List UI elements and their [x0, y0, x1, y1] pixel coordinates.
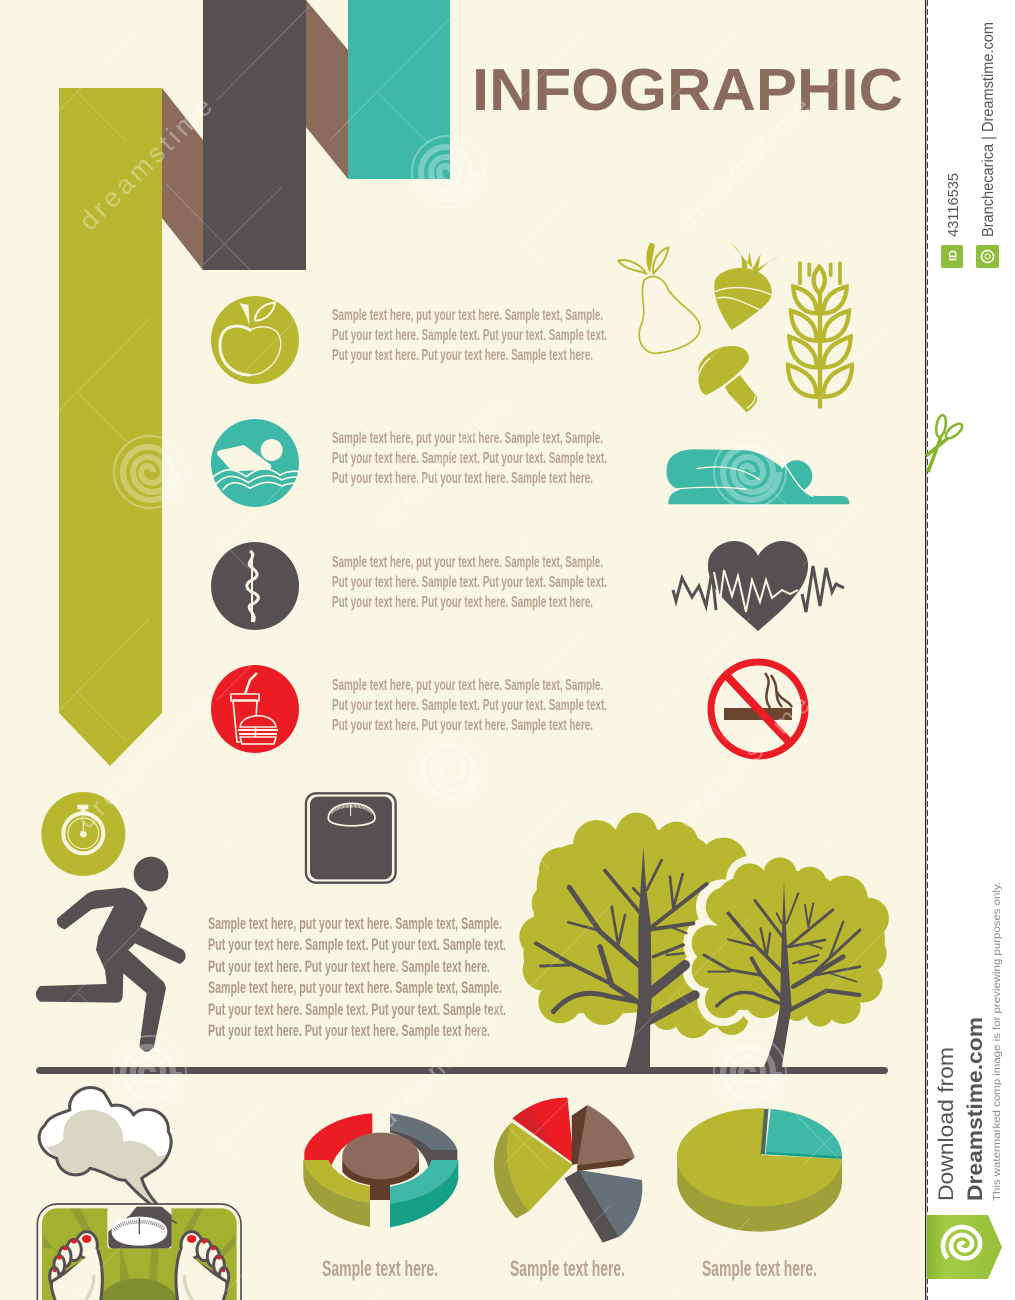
big tree trunk and branches	[536, 847, 707, 1069]
small tree halo and canopy	[683, 856, 860, 1027]
credit: Branchecarica | Dreamstime.com	[980, 22, 997, 237]
icon: turnip	[714, 243, 779, 330]
watermark words: dreamstime	[671, 91, 816, 236]
text block 1: Sample text here, put your text here. Sample text, Sample.	[332, 307, 603, 324]
text block 4: Put your text here. Sample text. Put your text. Sample text.	[332, 697, 607, 714]
text block 3: Put your text here. Sample text. Put your text. Sample text.	[332, 574, 607, 591]
bottom paragraph: Sample text here, put your text here. Sample text, Sample.	[208, 979, 502, 997]
text block 1	[332, 307, 607, 364]
text block 4: Sample text here, put your text here. Sample text, Sample.	[332, 677, 603, 694]
watermark words	[71, 91, 816, 1134]
bottom paragraph: Put your text here. Sample text. Put your text. Sample text.	[208, 1001, 506, 1019]
chart label 1: Sample text here.	[322, 1256, 438, 1281]
icon: mushroom	[698, 346, 757, 412]
text block 4: Put your text here. Put your text here. Sample text here.	[332, 717, 593, 734]
title: INFOGRAPHIC	[472, 57, 903, 123]
scale with feet	[37, 1204, 241, 1300]
icon: bathroom scale	[306, 793, 396, 883]
watermark words: dreamstime	[371, 989, 516, 1134]
text block 2: Sample text here, put your text here. Sample text, Sample.	[332, 430, 603, 447]
chart label 3: Sample text here.	[702, 1256, 817, 1281]
preview note: This watermarked comp image is for previewing purposes only.	[991, 882, 1003, 1201]
image id: 43116535	[945, 173, 962, 237]
big tree canopy	[519, 813, 750, 1038]
download heading: Download from	[935, 1047, 958, 1201]
exploded pie chart	[494, 1098, 642, 1243]
text block 2: Put your text here. Sample text. Put your text. Sample text.	[332, 450, 607, 467]
right foot	[176, 1232, 229, 1300]
watermark words: dreamstime	[73, 91, 218, 236]
watermark spirals	[114, 136, 786, 1108]
ground line	[36, 1067, 888, 1074]
ring chart	[303, 1113, 458, 1227]
small tree trunk and branches	[704, 882, 860, 1069]
ribbon: green, brown, dark and teal bands	[59, 0, 450, 766]
badge: copyright	[976, 245, 999, 268]
bottom paragraph: Put your text here. Put your text here. Sample text here.	[208, 958, 490, 976]
watermark words: dreamstime	[71, 689, 216, 834]
icon: yoga pose	[667, 449, 849, 504]
left foot	[50, 1232, 102, 1300]
cut line	[925, 0, 928, 1300]
text block 2	[332, 430, 607, 487]
icon: wheat	[788, 262, 852, 408]
text block 3: Sample text here, put your text here. Sample text, Sample.	[332, 554, 603, 571]
trees	[519, 813, 889, 1069]
icon: heart with pulse	[673, 541, 844, 631]
watermark words: dreamstime	[671, 689, 816, 834]
icon: no smoking	[711, 662, 805, 756]
badge: ID	[941, 245, 963, 268]
text block 4	[332, 677, 607, 734]
thought bubble	[39, 1087, 177, 1223]
text block 2: Put your text here. Put your text here. Sample text here.	[332, 470, 593, 487]
icon: rod of asclepius circle	[211, 542, 299, 630]
bottom paragraph	[208, 915, 506, 1040]
download banner	[927, 1215, 1002, 1279]
icon: scissors	[926, 414, 965, 472]
icon: stopwatch circle	[41, 792, 125, 876]
text block 1: Put your text here. Sample text. Put your text. Sample text.	[332, 327, 607, 344]
badge: ID: ID	[948, 250, 960, 261]
icon: fast food circle	[211, 665, 299, 753]
text block 1: Put your text here. Put your text here. Sample text here.	[332, 347, 593, 364]
icon: apple circle	[211, 296, 299, 384]
text block 3	[332, 554, 607, 611]
dreamstime heading: Dreamstime.com	[963, 1017, 987, 1201]
bottom paragraph: Put your text here. Put your text here. Sample text here.	[208, 1022, 490, 1040]
pie chart	[677, 1108, 842, 1232]
bottom paragraph: Put your text here. Sample text. Put your text. Sample text.	[208, 936, 506, 954]
icon: swimmer circle	[211, 419, 299, 507]
text block 3: Put your text here. Put your text here. Sample text here.	[332, 594, 593, 611]
icon: running person	[36, 857, 186, 1052]
watermark words: dreamstime	[371, 389, 516, 534]
icon: pear	[618, 243, 700, 353]
bottom paragraph: Sample text here, put your text here. Sample text, Sample.	[208, 915, 502, 933]
chart label 2: Sample text here.	[510, 1256, 625, 1281]
